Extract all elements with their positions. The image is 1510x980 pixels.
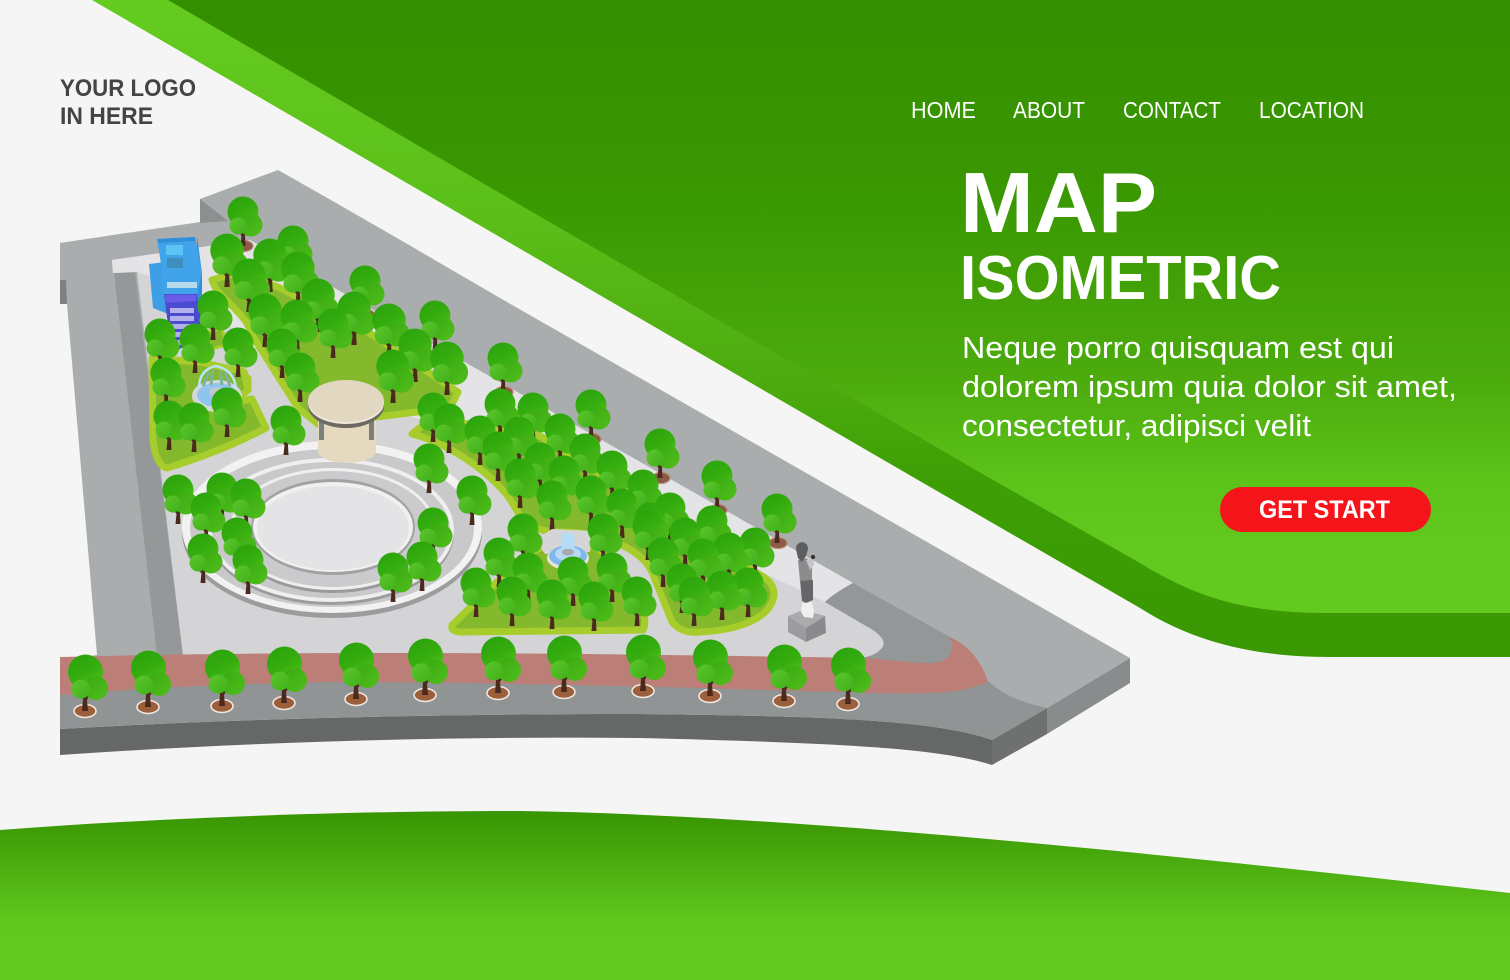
- dark road corner: [825, 583, 957, 664]
- red walking path: [60, 637, 988, 695]
- navigation menu: LOCATION: [1259, 97, 1364, 123]
- office building: [149, 236, 202, 350]
- logo text: [60, 75, 196, 130]
- isometric park map: [60, 170, 1130, 765]
- title: ISOMETRIC: [960, 244, 1281, 313]
- trees: central garden: [418, 388, 774, 626]
- slab front face: [60, 714, 992, 765]
- description paragraph: consectetur, adipisci velit: [962, 408, 1311, 443]
- navigation menu: CONTACT: [1123, 97, 1221, 123]
- bottom green hill: [0, 811, 1510, 980]
- trees: south garden: [460, 514, 656, 631]
- title: MAP: [960, 156, 1157, 251]
- fountain: west: [192, 366, 242, 412]
- road end shadow: [200, 199, 228, 223]
- lawn: north garden: [212, 272, 458, 424]
- inner left road strip: [114, 272, 183, 656]
- amphitheater rings: [182, 441, 482, 618]
- lawn: central garden: [412, 418, 774, 632]
- description paragraph: Neque porro quisquam est qui: [962, 330, 1394, 365]
- plaza light strip along the road: [112, 240, 853, 602]
- lawn: south garden: [452, 543, 645, 632]
- trees: fountain garden: [144, 318, 258, 452]
- fountain: central: [535, 529, 592, 570]
- lawn: fountain garden: [152, 358, 266, 468]
- road surface: [60, 170, 1130, 708]
- navigation menu: [911, 97, 1364, 123]
- plaza surface: [112, 240, 884, 658]
- slab right faces: [992, 658, 1130, 765]
- statue on pedestal: [788, 542, 826, 642]
- free standing trees with planters along the road: [488, 342, 796, 548]
- call to action button: GET START: [1259, 496, 1390, 524]
- lawn: small pieces: [205, 328, 250, 390]
- description paragraph: [962, 330, 1457, 443]
- navigation menu: ABOUT: [1013, 97, 1085, 123]
- logo text: YOUR LOGO: [60, 75, 196, 102]
- title: [960, 156, 1281, 313]
- top right header shape: main gradient: [168, 0, 1510, 613]
- top right header shape: outer band: [92, 0, 1510, 657]
- navigation menu: HOME: [911, 97, 976, 123]
- front lower road: [60, 680, 1047, 740]
- road left side notch: [60, 280, 67, 304]
- trees: amphitheater: [162, 406, 492, 602]
- trees: north garden: [198, 196, 468, 403]
- description paragraph: dolorem ipsum quia dolor sit amet,: [962, 369, 1457, 404]
- roadside trees with planters: [68, 634, 871, 718]
- call to action button: [1220, 487, 1431, 532]
- logo text: IN HERE: [60, 103, 153, 130]
- pavilion: [308, 380, 384, 463]
